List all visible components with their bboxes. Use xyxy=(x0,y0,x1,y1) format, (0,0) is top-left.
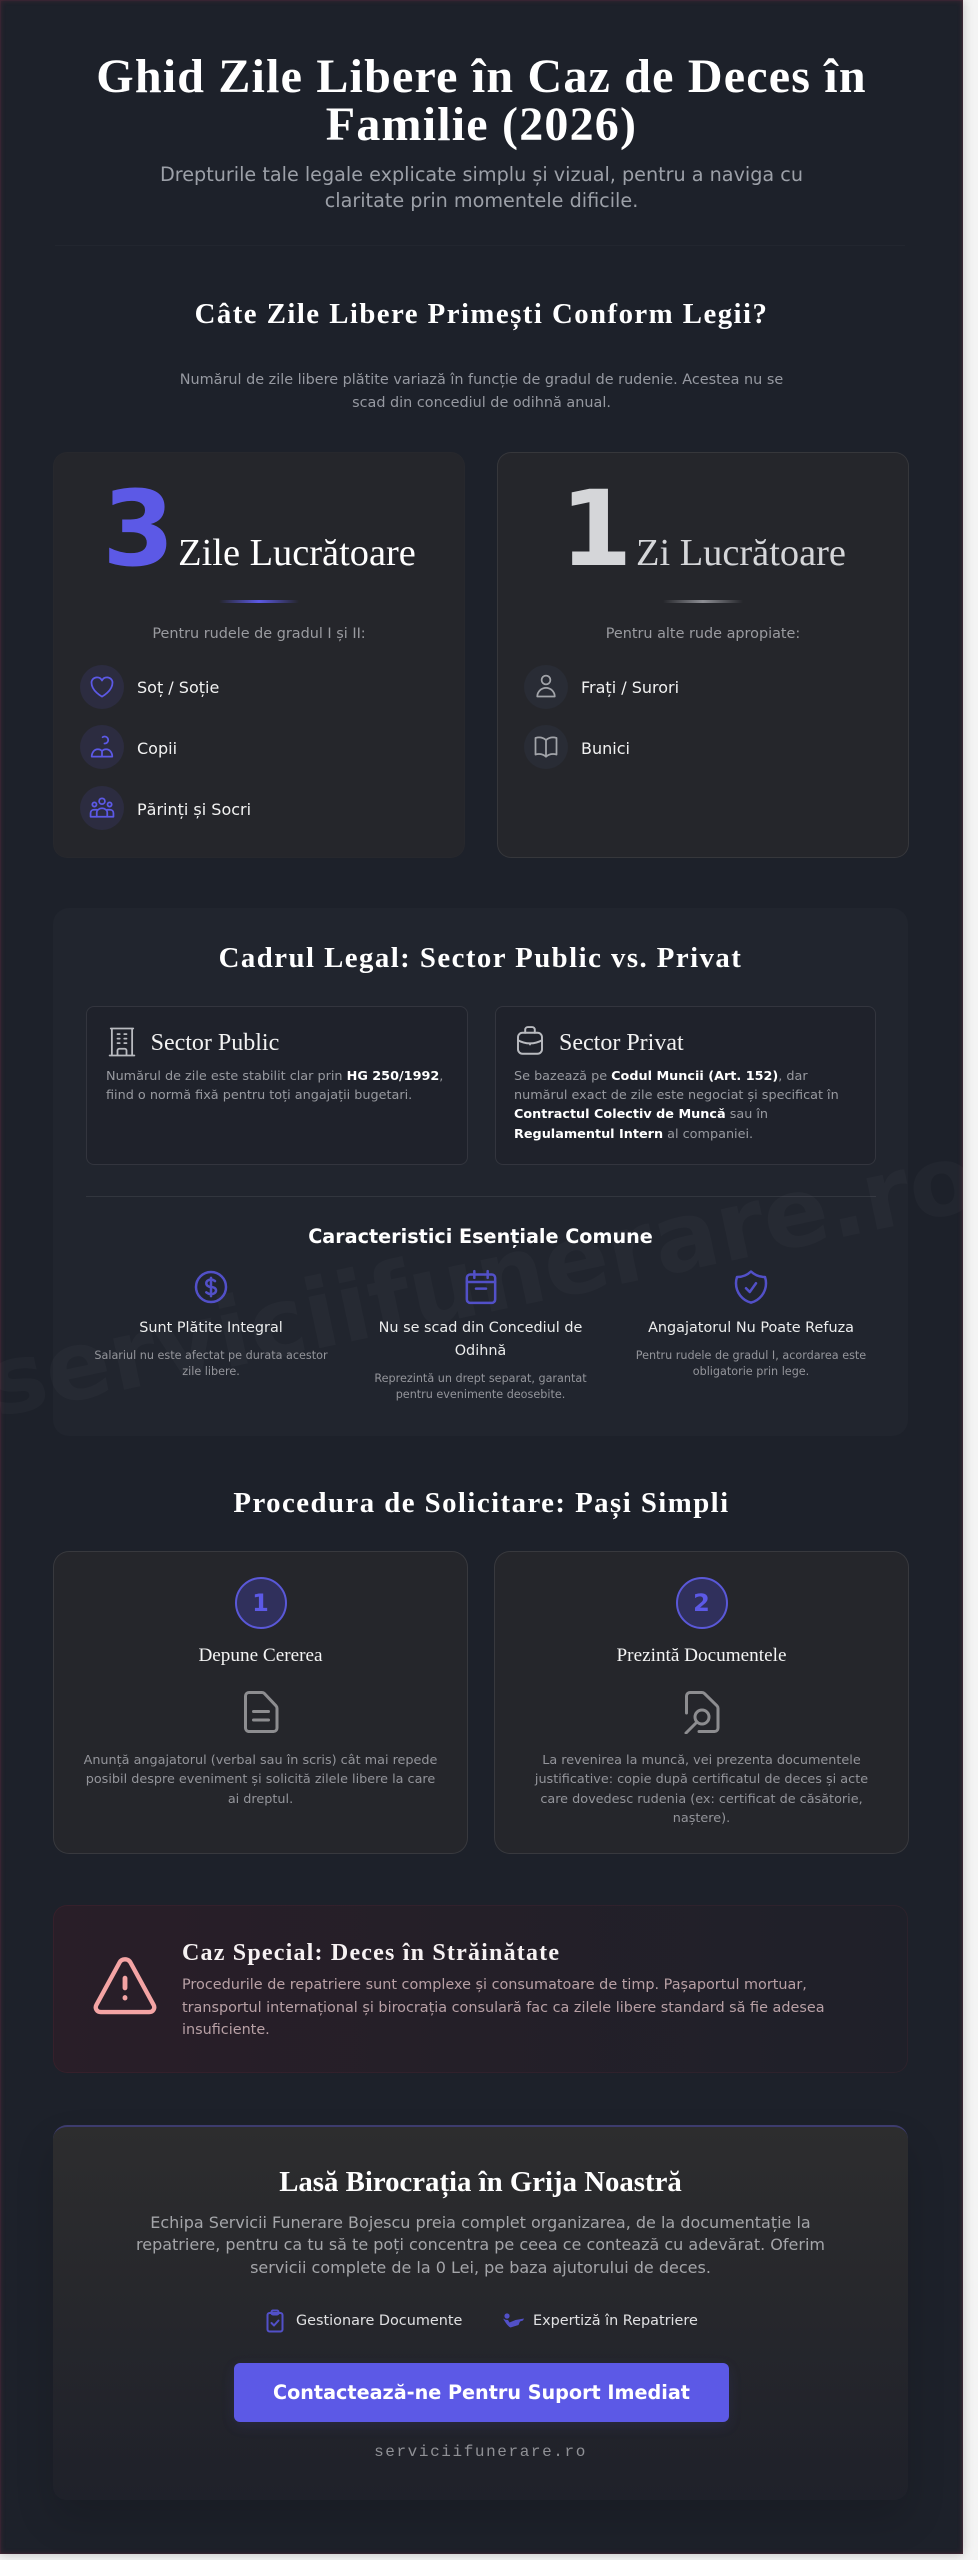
panel: legal framework xyxy=(53,908,908,1436)
step text xyxy=(534,1753,868,1826)
intro text xyxy=(180,372,783,410)
feature text xyxy=(94,1349,328,1378)
step text: posibil despre eveniment și solicită zilele libere la care xyxy=(86,1772,435,1787)
feature text: Salariul nu este afectat pe durata acestor xyxy=(94,1349,328,1362)
feature: cannot refuse xyxy=(636,1270,866,1378)
title: Familie (2026) xyxy=(326,98,637,150)
step text: ai dreptul. xyxy=(228,1792,293,1807)
step text: justificative: copie după certificatul de deces și acte xyxy=(535,1772,868,1787)
icon: person xyxy=(524,665,568,709)
feature text: obligatorie prin lege. xyxy=(693,1365,809,1378)
heading: how many days: Câte Zile Libere Primești Conform Legii? xyxy=(195,298,768,330)
step title: Depune Cererea xyxy=(198,1644,323,1666)
icon: calendar xyxy=(466,1270,496,1304)
icon: document xyxy=(244,1691,278,1733)
item: grandparents: Bunici xyxy=(581,738,630,758)
feature text xyxy=(636,1349,866,1378)
intro text: scad din concediul de odihnă anual. xyxy=(352,394,611,410)
feature text: Reprezintă un drept separat, garantat xyxy=(374,1372,587,1385)
icon: hand xyxy=(503,2313,524,2328)
icon: briefcase xyxy=(517,1026,543,1055)
item: parents: Părinți și Socri xyxy=(137,800,251,818)
heading: common features: Caracteristici Esențiale Comune xyxy=(308,1224,653,1248)
callout: death abroad xyxy=(53,1905,908,2073)
panel: call to action xyxy=(53,2125,908,2500)
step text: naștere). xyxy=(673,1811,730,1826)
button xyxy=(234,2363,729,2422)
item: children: Copii xyxy=(137,738,177,758)
CTA text: Echipa Servicii Funerare Bojescu preia complet organizarea, de la documentație la xyxy=(150,2212,811,2232)
icon: clipboard xyxy=(266,2310,284,2332)
callout title: Caz Special: Deces în Străinătate xyxy=(182,1940,560,1966)
heading: let us handle: Lasă Birocrația în Grija Noastră xyxy=(279,2166,682,2198)
title xyxy=(96,50,867,150)
step text: Anunță angajatorul (verbal sau în scris) cât mai repede xyxy=(84,1753,437,1768)
card text: private xyxy=(514,1069,839,1142)
feature title: Angajatorul Nu Poate Refuza xyxy=(648,1320,854,1336)
card text: public xyxy=(106,1069,443,1103)
card text: private: Regulamentul Intern al companiei. xyxy=(514,1127,753,1142)
feature text xyxy=(374,1372,587,1401)
icon: heart xyxy=(80,665,124,709)
heading: legal framework: Cadrul Legal: Sector Public vs. Privat xyxy=(219,942,742,974)
feature: fully paid xyxy=(94,1270,328,1378)
feature title: Odihnă xyxy=(455,1342,506,1358)
step 2 xyxy=(494,1551,909,1854)
feature title: Nu se scad din Concediul de xyxy=(379,1320,582,1336)
panel: 3 working days xyxy=(53,452,465,858)
card text: private: Se bazează pe Codul Muncii (Art. 152), dar xyxy=(514,1069,808,1084)
icon: child xyxy=(80,725,124,769)
button: Contactează-ne Pentru Suport Imediat xyxy=(273,2381,690,2404)
callout text: transportul internațional și birocrația consulară fac ca zilele libere standard să fie adesea xyxy=(182,2000,825,2016)
step number: 1 xyxy=(252,1589,269,1617)
step number xyxy=(234,1577,286,1629)
card text: private: numărul exact de zile este negociat și specificat în xyxy=(514,1088,839,1103)
CTA text xyxy=(136,2212,825,2277)
feature title: Sunt Plătite Integral xyxy=(139,1320,283,1336)
feature: separate from leave xyxy=(374,1270,587,1401)
subtitle: Drepturile tale legale explicate simplu și vizual, pentru a naviga cu xyxy=(160,163,803,186)
callout text xyxy=(182,1977,825,2038)
title: Ghid Zile Libere în Caz de Deces în xyxy=(96,50,867,103)
feature: documents: Gestionare Documente xyxy=(296,2313,462,2329)
heading: procedure: Procedura de Solicitare: Pași Simpli xyxy=(233,1487,730,1519)
subtitle xyxy=(160,163,803,212)
card title: private: Sector Privat xyxy=(559,1030,684,1056)
step title: Prezintă Documentele xyxy=(617,1644,786,1666)
item: siblings: Frați / Surori xyxy=(581,678,679,696)
callout text: Procedurile de repatriere sunt complexe și consumatoare de timp. Pașaportul mortuar, xyxy=(182,1977,807,1993)
icon: shield xyxy=(734,1270,768,1304)
feature: repatriation: Expertiză în Repatriere xyxy=(533,2313,698,2329)
panel: 1 working day xyxy=(497,452,909,858)
card: private sector xyxy=(495,1006,876,1165)
step 1 xyxy=(53,1551,468,1854)
card text: private: Contractul Colectiv de Muncă sau în xyxy=(514,1107,768,1122)
feature text: pentru evenimente deosebite. xyxy=(396,1388,565,1401)
step text xyxy=(84,1753,437,1807)
step text: care dovedesc rudenia (ex: certificat de căsătorie, xyxy=(540,1792,863,1807)
subtitle: claritate prin momentele dificile. xyxy=(325,189,638,212)
number: 1 day: 1Zi Lucrătoare xyxy=(560,468,846,590)
step text: La revenirea la muncă, vei prezenta documentele xyxy=(542,1753,861,1768)
icon: family xyxy=(80,786,124,830)
icon: building xyxy=(108,1028,136,1056)
icon: document search xyxy=(684,1691,720,1734)
icon: book xyxy=(524,725,568,769)
number: 3 days: 3Zile Lucrătoare xyxy=(102,468,416,590)
feature text: zile libere. xyxy=(182,1365,240,1378)
icon: warning xyxy=(94,1957,156,2014)
card title: public: Sector Public xyxy=(151,1030,279,1056)
callout text: insuficiente. xyxy=(182,2022,270,2038)
CTA text: servicii complete de la 0 Lei, pe baza ajutorului de deces. xyxy=(250,2258,711,2277)
feature title xyxy=(379,1320,582,1358)
label: first and second degree: Pentru rudele de gradul I și II: xyxy=(152,626,366,642)
website: serviciifunerare.ro xyxy=(374,2443,587,2461)
item: spouse: Soț / Soție xyxy=(137,678,219,696)
feature text: Pentru rudele de gradul I, acordarea este xyxy=(636,1349,866,1362)
CTA text: repatriere, pentru ca tu să te poți concentra pe ceea ce contează cu adevărat. Oferim xyxy=(136,2235,825,2254)
step number: 2 xyxy=(693,1589,710,1617)
card: public sector xyxy=(86,1006,468,1165)
intro text: Numărul de zile libere plătite variază în funcție de gradul de rudenie. Acestea nu se xyxy=(180,372,783,388)
icon: dollar xyxy=(194,1270,228,1304)
step number xyxy=(676,1577,728,1629)
label: other relatives: Pentru alte rude apropiate: xyxy=(606,626,800,642)
card text: public: fiind o normă fixă pentru toți angajații bugetari. xyxy=(106,1088,412,1103)
card text: public: Numărul de zile este stabilit clar prin HG 250/1992, xyxy=(106,1069,443,1084)
